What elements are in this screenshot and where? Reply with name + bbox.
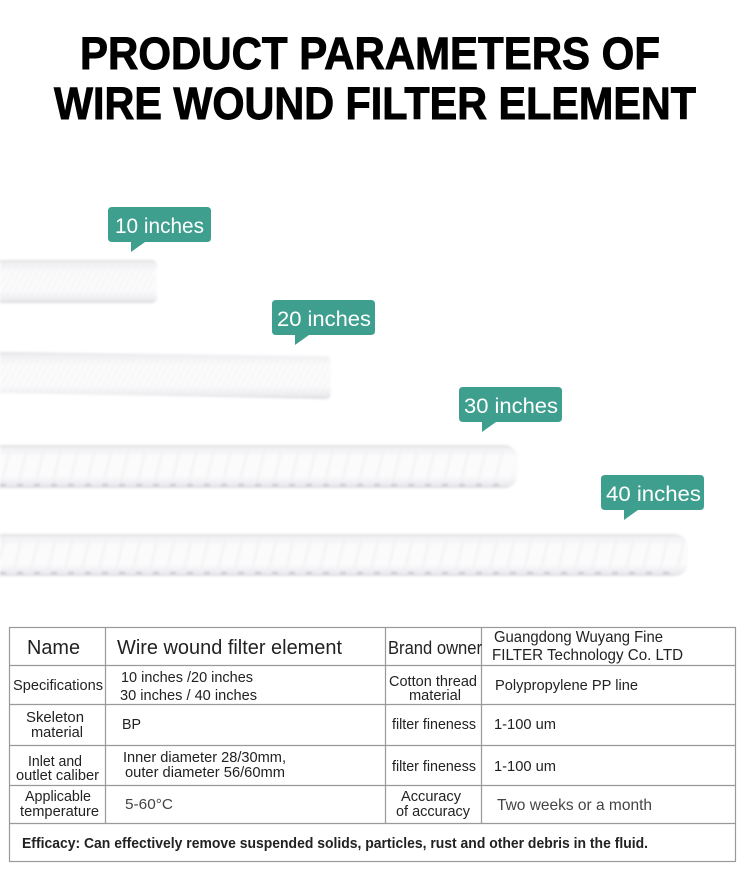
row: name: Brand owner [388, 638, 482, 658]
callout: 10 inches [108, 207, 211, 252]
callout: 30 inches: 30 inches [464, 394, 558, 418]
row: skeleton material: material [31, 724, 83, 741]
row: skeleton material [26, 709, 556, 741]
row: skeleton material: Skeleton [26, 709, 84, 726]
title: PRODUCT PARAMETERS OF [80, 28, 660, 79]
row: applicable temperature: Accuracy [401, 788, 461, 805]
row: applicable temperature: Applicable [25, 788, 91, 805]
callout: 40 inches [601, 475, 704, 520]
row: name: Name [27, 637, 80, 659]
row: name [27, 629, 683, 664]
parameters table [10, 628, 736, 862]
row: inlet and outlet caliber: 1-100 um [494, 758, 556, 775]
row: applicable temperature: of accuracy [396, 803, 470, 820]
row: inlet and outlet caliber: Inner diameter 28/30mm, [123, 749, 286, 766]
filter element: 30 inches [0, 445, 518, 488]
row: specifications: Polypropylene PP line [495, 677, 638, 694]
row: applicable temperature: Two weeks or a month [497, 797, 652, 814]
row: inlet and outlet caliber: filter fineness [392, 758, 476, 775]
row: name: FILTER Technology Co. LTD [492, 647, 683, 664]
row: skeleton material: BP [122, 716, 141, 733]
row: name: Wire wound filter element [117, 637, 342, 659]
row: inlet and outlet caliber: outer diameter 56/60mm [125, 764, 285, 781]
callout: 30 inches [459, 387, 562, 432]
row: specifications: material [409, 687, 461, 704]
row: inlet and outlet caliber [16, 749, 556, 784]
row: inlet and outlet caliber: Inlet and [28, 753, 82, 770]
callout: 40 inches: 40 inches [606, 482, 701, 506]
title: WIRE WOUND FILTER ELEMENT [54, 78, 696, 129]
row: skeleton material: filter fineness [392, 716, 476, 733]
filter element: 20 inches [0, 352, 331, 399]
filter element: 40 inches [0, 534, 688, 576]
row: applicable temperature [20, 788, 652, 820]
filter element: 10 inches [0, 260, 157, 303]
table grid [10, 628, 736, 862]
row: efficacy: Efficacy: Can effectively remove suspended solids, particles, rust and other debris in the fluid. [22, 836, 648, 852]
title [54, 28, 696, 129]
row: specifications: Cotton thread [389, 673, 477, 690]
row: applicable temperature: 5-60°C [125, 796, 173, 813]
row: specifications: 30 inches / 40 inches [120, 687, 257, 704]
callout: 20 inches: 20 inches [277, 307, 371, 331]
row: skeleton material: 1-100 um [494, 716, 556, 733]
row: applicable temperature: temperature [20, 803, 99, 820]
row: specifications: 10 inches /20 inches [121, 669, 253, 686]
row: specifications [13, 669, 638, 704]
row: specifications: Specifications [13, 677, 103, 694]
callout: 20 inches [272, 300, 375, 345]
row: inlet and outlet caliber: outlet caliber [16, 767, 99, 784]
callout: 10 inches: 10 inches [115, 214, 204, 238]
row: name: Guangdong Wuyang Fine [494, 629, 663, 646]
